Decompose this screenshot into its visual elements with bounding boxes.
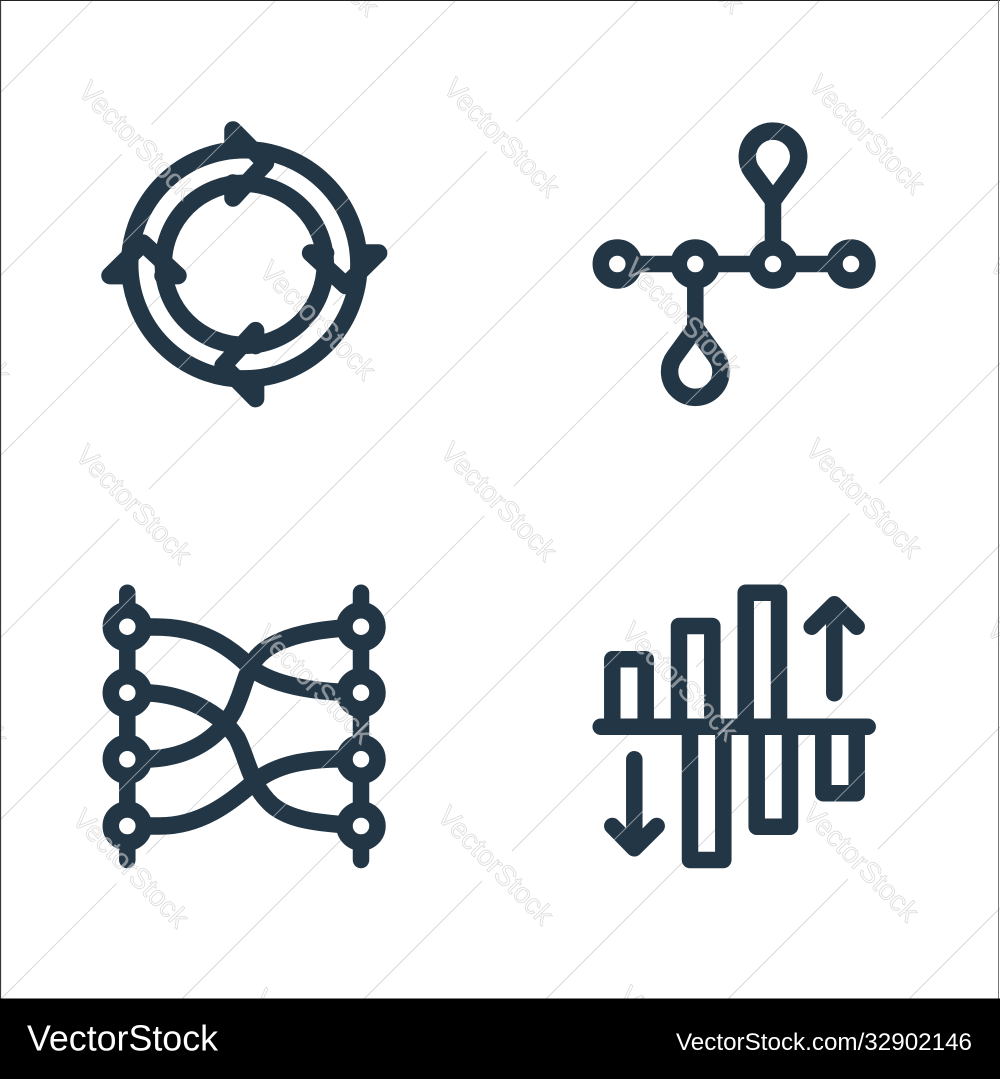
watermark pattern: VectorStock (802, 69, 931, 201)
footer bar (0, 998, 1000, 1079)
watermark pattern: VectorStock (72, 75, 201, 207)
watermark pattern: VectorStock (66, 803, 195, 935)
watermark pattern: VectorStock (431, 800, 560, 932)
footer image id: VectorStock.com/32902146 (676, 1029, 972, 1056)
watermark pattern: VectorStock (615, 616, 744, 748)
footer brand name: VectorStock (27, 1018, 219, 1058)
icon: diverging bar chart with up and down arrows (601, 593, 868, 860)
watermark pattern: VectorStock (796, 797, 925, 929)
watermark pattern: VectorStock (434, 436, 563, 568)
watermark pattern: VectorStock (799, 433, 928, 565)
watermark pattern: VectorStock (250, 619, 379, 751)
watermark pattern: VectorStock (437, 72, 566, 204)
icon: circular arrows cycle (110, 130, 379, 399)
icon: crossing network between two node rails (111, 593, 378, 860)
watermark pattern: VectorStock (69, 439, 198, 571)
watermark pattern: VectorStock (253, 255, 382, 387)
watermark pattern: VectorStock (618, 252, 747, 384)
icon: nodes with teardrop branches (601, 131, 868, 397)
